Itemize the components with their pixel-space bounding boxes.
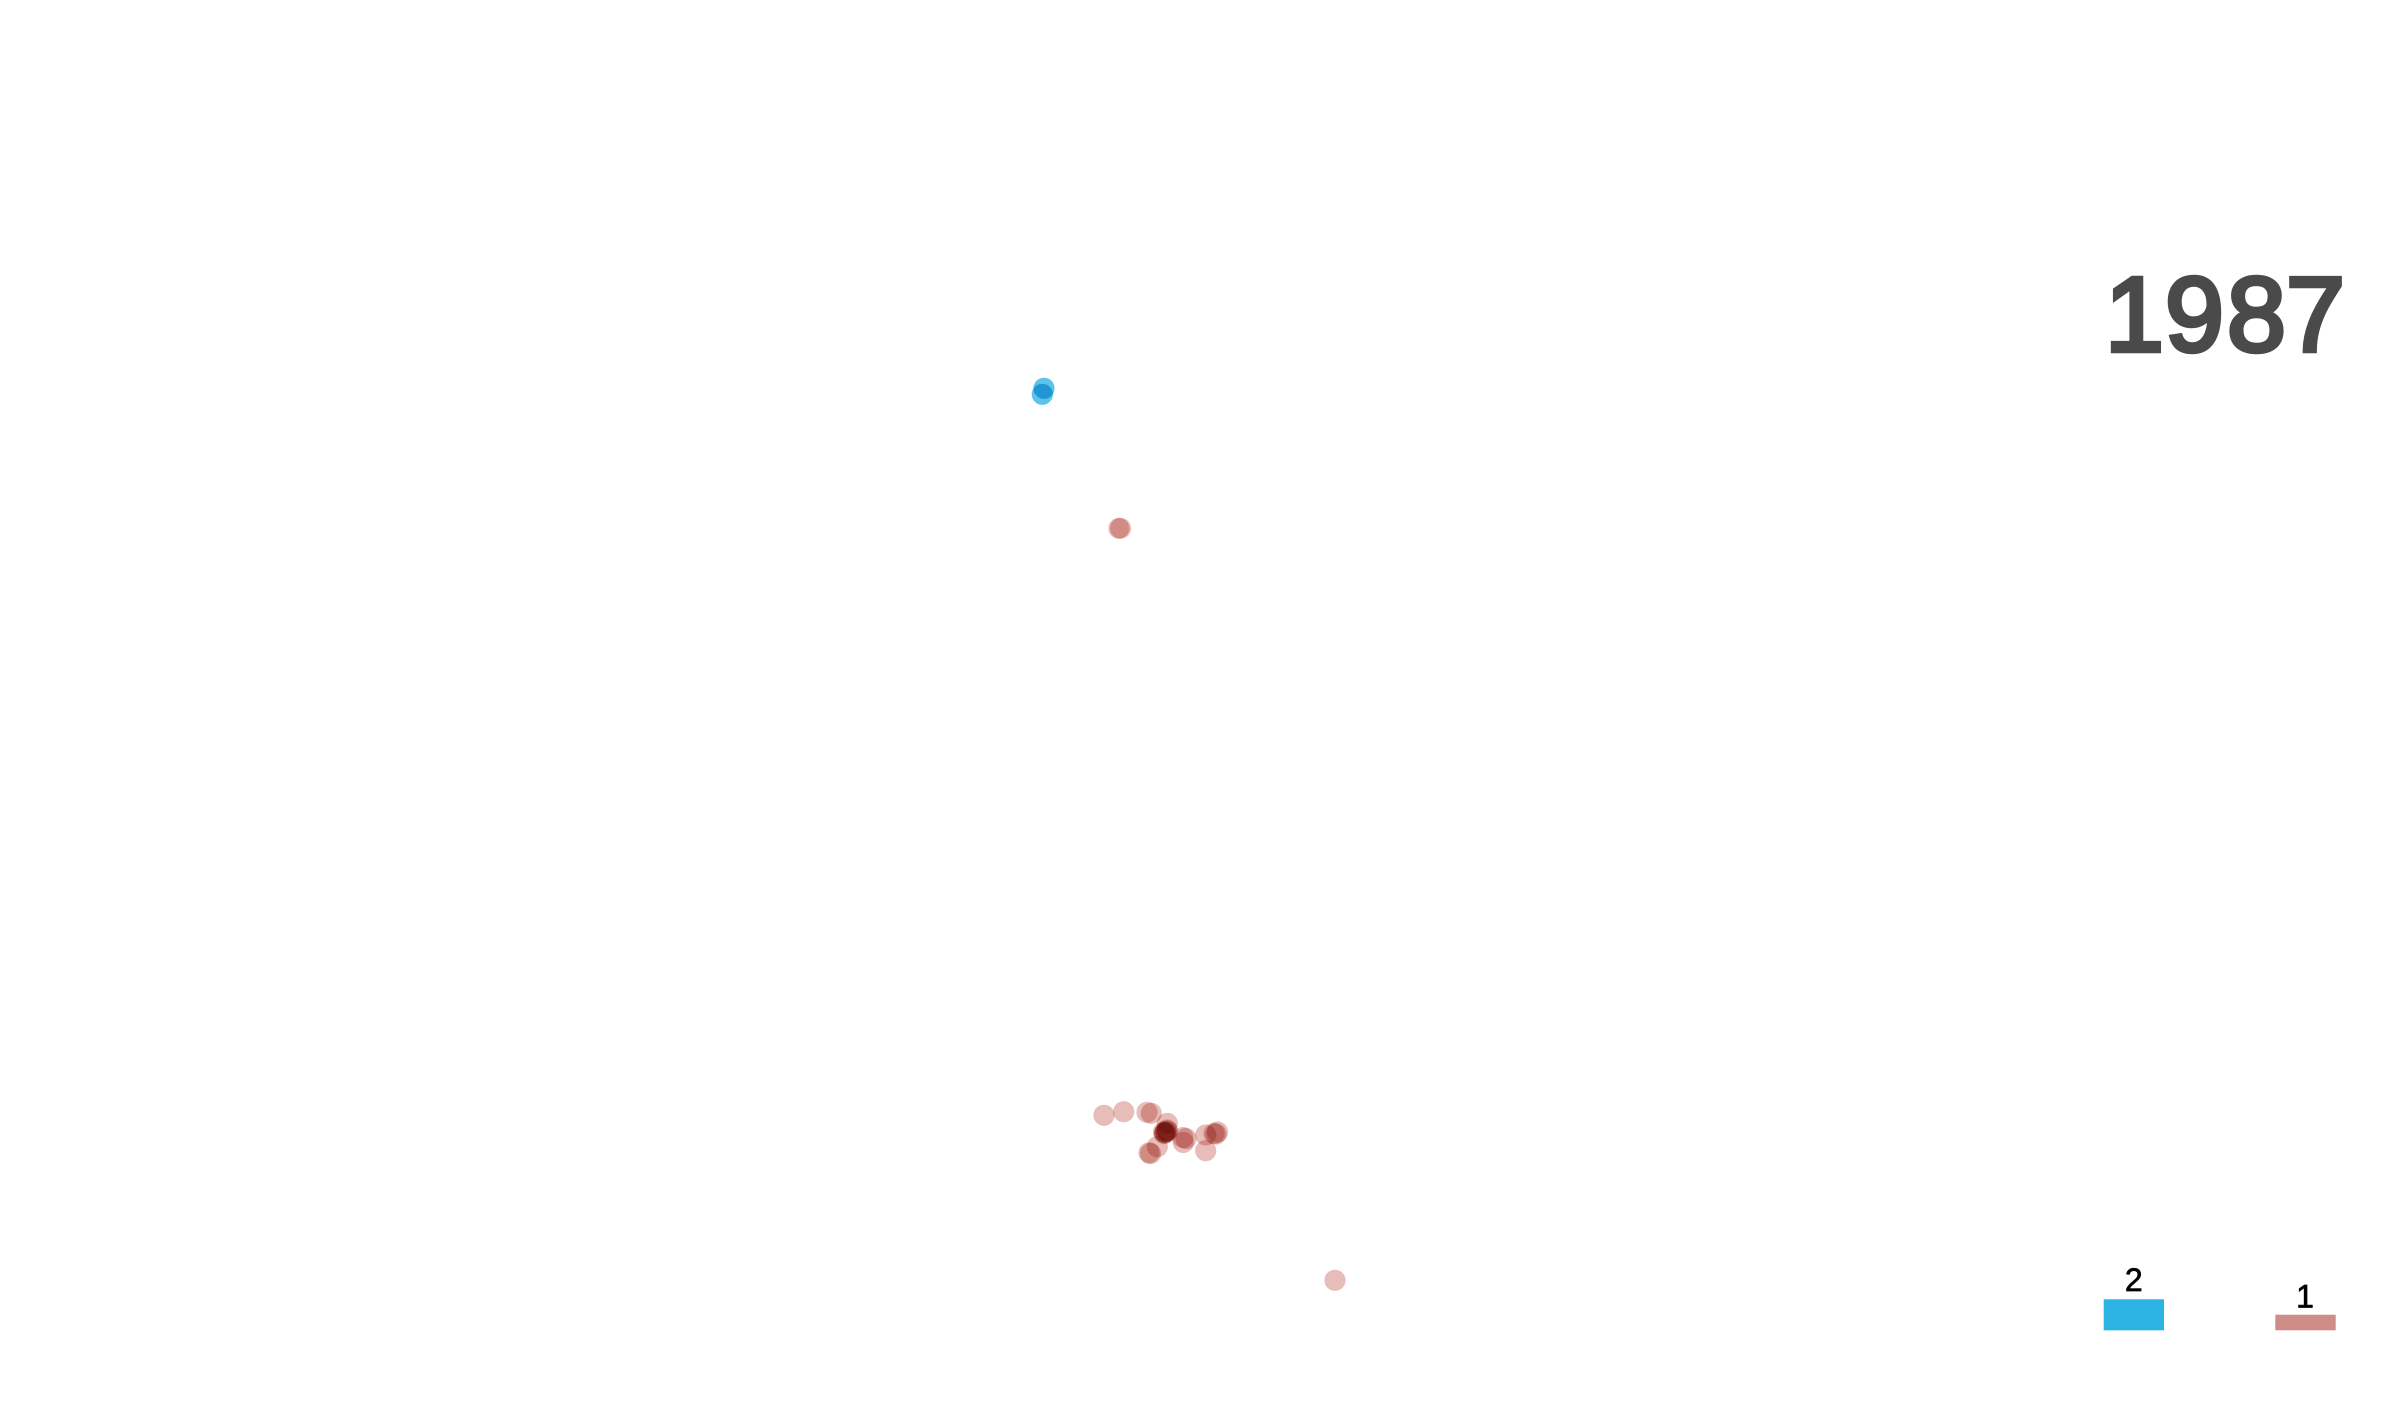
red dots: upper pair (1108, 518, 1131, 539)
legend bar: value 1 (2275, 1315, 2336, 1330)
red dot: lower outlier (1324, 1270, 1346, 1291)
blue dots cluster: upper (1032, 378, 1055, 405)
legend label: value 2: 2 (2125, 1262, 2143, 1298)
year label: 1987 (2105, 256, 2345, 374)
legend (2104, 1262, 2336, 1330)
legend label: value 1: 1 (2296, 1278, 2314, 1314)
red dots cluster: lower (1093, 1101, 1228, 1164)
legend bar: value 2 (2104, 1299, 2164, 1330)
